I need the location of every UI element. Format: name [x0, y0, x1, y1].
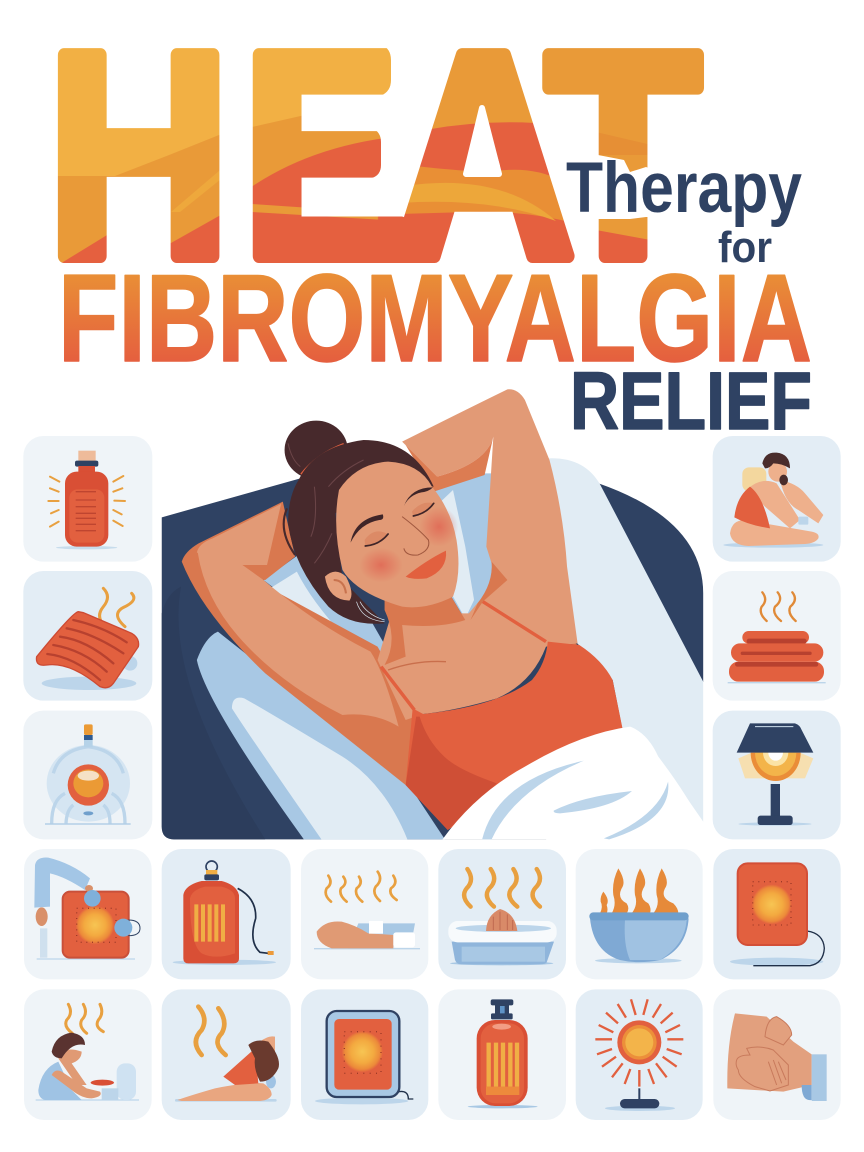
trim on the E middle arm — [372, 128, 402, 178]
icon: framed infrared heater — [301, 989, 428, 1120]
icon: electric heat bottle with cord — [162, 849, 291, 979]
icon: heat pad with cord — [713, 849, 841, 979]
hair — [288, 440, 434, 624]
mattress highlight — [232, 698, 407, 839]
closed eyes — [365, 503, 434, 546]
right armpit shadow — [471, 562, 507, 620]
left upper arm — [198, 540, 399, 727]
counter of the letter A — [466, 108, 499, 174]
gap cut out of the T stem — [590, 155, 660, 219]
icon: infrared device — [23, 711, 152, 839]
loose hair behind ear — [284, 508, 295, 555]
hero illustration: woman resting on bed — [162, 389, 703, 839]
title: HEAT Therapy for Fibromyalgia Relief — [47, 0, 812, 447]
ear — [325, 572, 351, 601]
fourth and fifth rows of icons, left half — [24, 849, 428, 1120]
mattress pillow on the left — [197, 632, 445, 839]
right column of icons — [713, 436, 841, 839]
icon: stack of warm towels with steam — [713, 571, 841, 701]
hair strands — [288, 443, 364, 563]
icon: hand pressing heat pad — [24, 849, 152, 979]
forearm — [197, 504, 281, 565]
neck shadow — [385, 597, 465, 665]
icon: person soaking hands — [24, 989, 152, 1120]
hair band — [302, 445, 344, 475]
cheeks — [359, 507, 458, 582]
head pillow — [264, 473, 499, 657]
icon: hot water bottle with rays — [23, 436, 152, 562]
sheet on the right — [546, 458, 703, 822]
elbow rim behind forearm — [182, 502, 295, 580]
icon: steaming bowl — [576, 849, 703, 979]
icon: seated woman applying heat to foot — [713, 436, 841, 562]
heading word: HEAT: HEAT — [47, 0, 701, 318]
tank top — [381, 602, 632, 830]
blanket folds — [482, 761, 668, 839]
icon: hand in warm bath — [438, 849, 566, 979]
headboard shading — [162, 587, 265, 839]
bed headboard — [162, 478, 703, 839]
nose — [402, 517, 429, 555]
icon: woman stretching with steam — [162, 989, 291, 1120]
heading word: RELIEF: RELIEF — [570, 356, 812, 447]
trim on the E top arm — [380, 44, 422, 96]
eyebrows — [351, 487, 433, 543]
smiling lips — [406, 551, 446, 579]
icon: heat lamp — [713, 711, 841, 839]
white blanket — [442, 727, 703, 839]
collarbone line — [388, 661, 446, 670]
left column of icons — [23, 436, 152, 839]
face — [336, 462, 458, 607]
icon: heating pad with steam — [23, 571, 152, 701]
chest and neck — [378, 580, 578, 720]
heading word: for: for — [718, 223, 772, 272]
heading word: Therapy: Therapy — [566, 149, 802, 228]
icon: wrapped wrist with steam — [301, 849, 428, 979]
right arm raised — [402, 389, 578, 645]
hair bun — [285, 421, 348, 479]
underarm shadow — [182, 562, 418, 785]
eyelids — [365, 503, 434, 546]
fourth and fifth rows of icons, right half — [438, 849, 841, 1120]
earring strands — [357, 602, 385, 622]
icon: radiant sun heater on stand — [576, 989, 703, 1120]
icon: round heat bottle — [438, 989, 566, 1120]
icon: hands massaging skin — [713, 989, 841, 1120]
